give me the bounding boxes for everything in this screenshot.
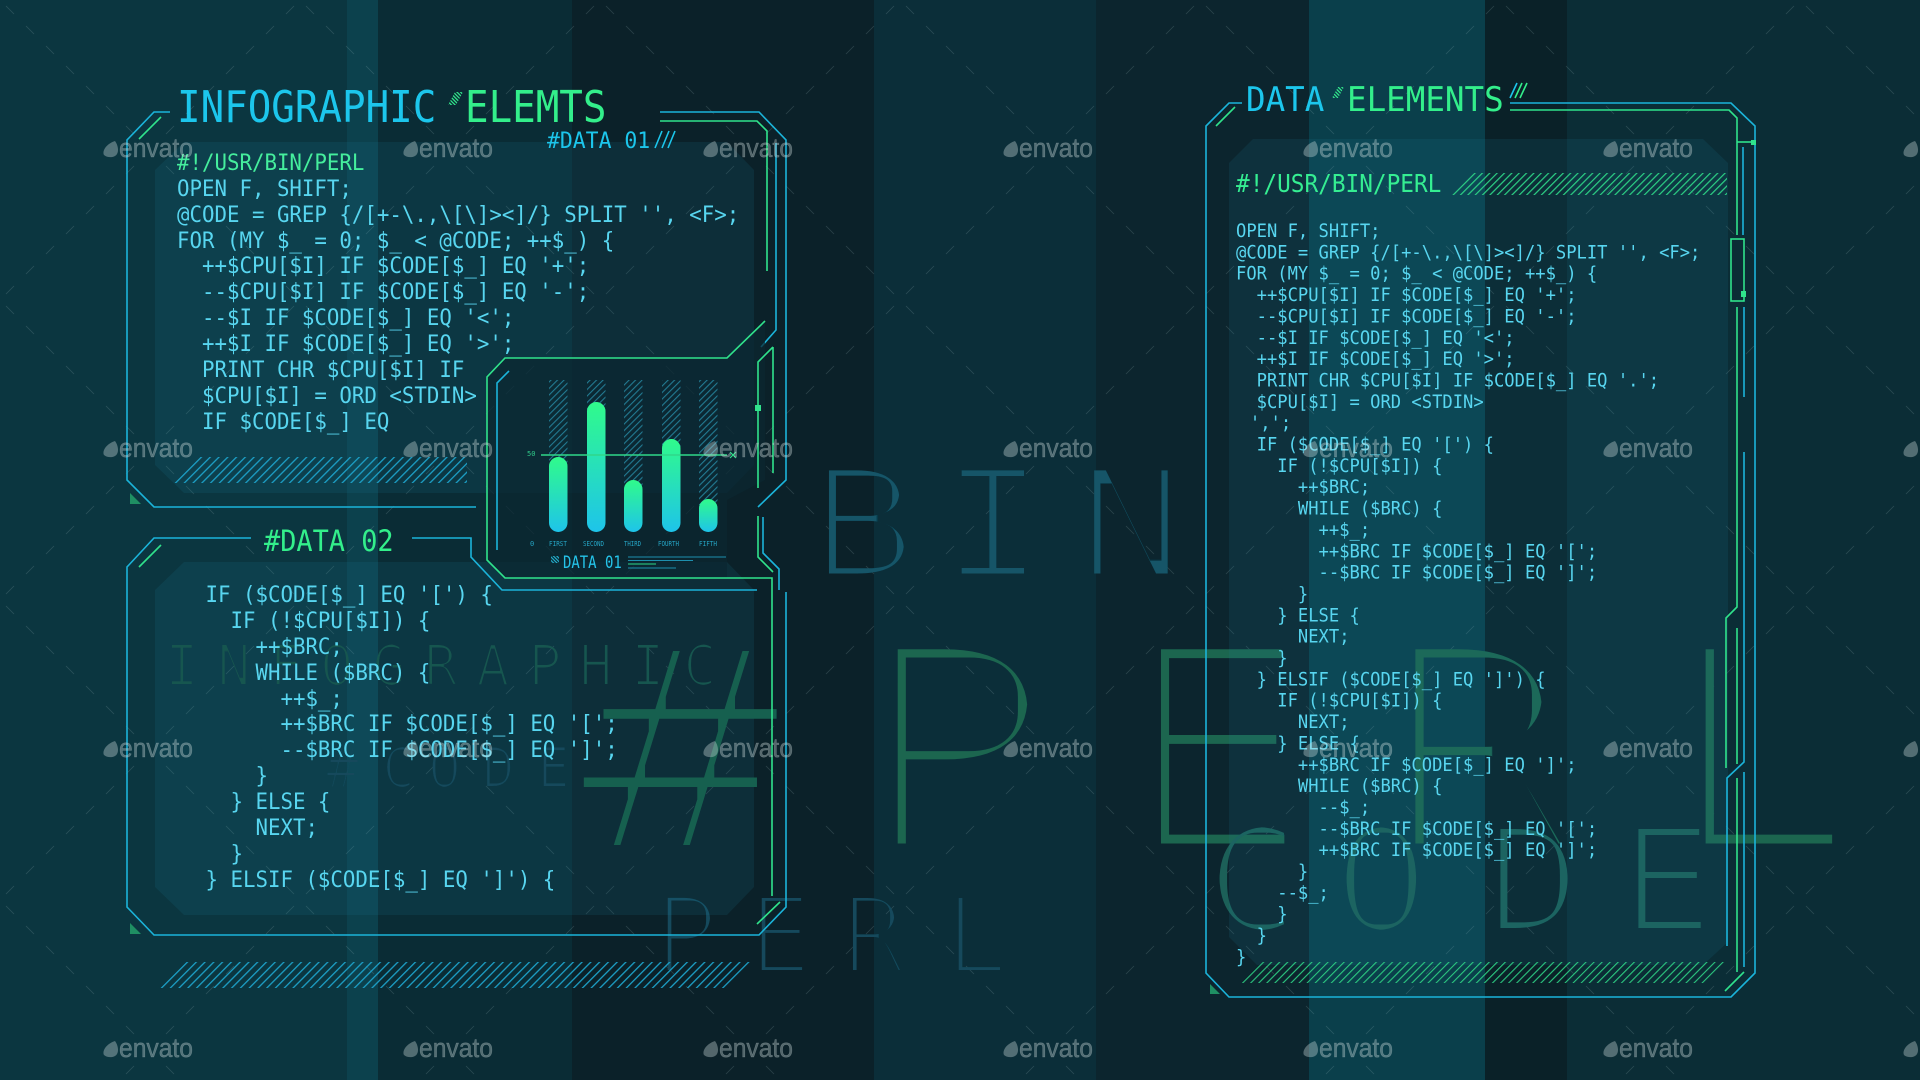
envato watermarks: envato — [1619, 733, 1693, 763]
chart axis labels: FOURTH — [658, 540, 679, 548]
chart axis labels: 0 — [530, 540, 534, 548]
envato watermarks: envato — [1019, 133, 1093, 163]
code block: data elements panel: OPEN F, SHIFT; — [1236, 220, 1380, 242]
code block: panel 2: } — [206, 841, 243, 867]
code block: panel 1: PRINT CHR $CPU[$I] IF — [177, 357, 464, 383]
code block: data elements panel: PRINT CHR $CPU[$I] IF $CODE[$_] EQ '.'; — [1236, 370, 1659, 392]
envato watermarks: envato — [119, 433, 193, 463]
code block: data elements panel: ++$BRC; — [1236, 477, 1370, 498]
code block: panel 2: IF ($CODE[$_] EQ '[') { — [206, 582, 493, 608]
envato watermarks: envato — [1619, 433, 1693, 463]
code block: panel 1: ++$CPU[$I] IF $CODE[$_] EQ '+'; — [177, 253, 589, 279]
code block: panel 1: IF $CODE[$_] EQ — [177, 409, 389, 435]
code block: data elements panel: } ELSE { — [1236, 733, 1360, 755]
code block: data elements panel: IF ($CODE[$_] EQ '[') { — [1236, 434, 1494, 456]
title: infographic elements: INFOGRAPHIC — [177, 81, 436, 133]
chart axis labels: FIRST — [549, 540, 568, 548]
code block: data elements panel: IF (!$CPU[$I]) { — [1236, 690, 1442, 712]
envato watermarks: envato — [119, 1033, 193, 1063]
code block: data elements panel: ++$_; — [1236, 519, 1370, 541]
envato watermarks: envato — [119, 733, 193, 763]
code block: data elements panel: NEXT; — [1236, 626, 1350, 648]
envato watermarks: envato — [719, 433, 793, 463]
code block: data elements panel: } — [1236, 647, 1288, 669]
code block: panel 1: FOR (MY $_ = 0; $_ < @CODE; ++$_) { — [177, 228, 614, 254]
envato watermarks: envato — [1619, 1033, 1693, 1063]
ghost word: small PERL: PERL — [654, 875, 1008, 999]
code block: data elements panel: NEXT; — [1236, 712, 1350, 733]
code block: data elements panel: ++$BRC IF $CODE[$_] EQ '['; — [1236, 541, 1597, 562]
envato watermarks: envato — [719, 133, 793, 163]
frame: data elements panel — [1206, 103, 1756, 997]
code block: data elements panel: } — [1236, 861, 1308, 883]
code block: data elements panel: --$BRC IF $CODE[$_] EQ ']'; — [1236, 562, 1597, 584]
code block: panel 2: } — [206, 763, 268, 789]
panel fill: data 02 — [155, 562, 754, 915]
envato watermarks: envato — [1319, 433, 1393, 463]
code block: panel 1 — [177, 150, 739, 435]
chart axis labels: SECOND — [583, 540, 604, 548]
chart axis labels: FIFTH — [699, 540, 717, 548]
code block: panel 1: @CODE = GREP {/[+-\.,\[\]><]/} SPLIT '', <F>; — [177, 202, 739, 228]
chart frame — [487, 321, 772, 896]
code block: data elements panel: WHILE ($BRC) { — [1236, 776, 1442, 797]
envato watermarks: envato — [419, 133, 493, 163]
panel fill: infographic elements — [155, 142, 754, 493]
code block: panel 2 — [206, 582, 618, 893]
code block: data elements panel: ++$I IF $CODE[$_] EQ '>'; — [1236, 348, 1515, 370]
envato watermarks: envato — [1019, 733, 1093, 763]
code block: panel 1: --$I IF $CODE[$_] EQ '<'; — [177, 305, 514, 331]
ghost word: large PERL: PERL — [853, 585, 1860, 919]
code block: panel 2: ++$BRC; — [206, 634, 343, 660]
title: infographic elements — [177, 81, 606, 133]
code block: data elements panel — [1236, 220, 1700, 968]
ghost word: CODE: CODE — [1204, 798, 1716, 966]
code block: data elements panel: --$I IF $CODE[$_] EQ '<'; — [1236, 327, 1515, 349]
code block: panel 1: $CPU[$I] = ORD <STDIN> — [177, 383, 477, 409]
code block: panel 2: WHILE ($BRC) { — [206, 660, 430, 686]
envato watermarks: envato — [1019, 1033, 1093, 1063]
code block: panel 2: ++$_; — [206, 686, 343, 712]
code block: panel 2: ++$BRC IF $CODE[$_] EQ '['; — [206, 711, 618, 737]
subheading: perl path with hatch — [1236, 169, 1727, 198]
code block: panel 1: --$CPU[$I] IF $CODE[$_] EQ '-'; — [177, 279, 589, 305]
code block: panel 1: ++$I IF $CODE[$_] EQ '>'; — [177, 331, 514, 357]
code block: data elements panel: --$_; — [1236, 797, 1370, 819]
envato watermarks: envato — [719, 733, 793, 763]
envato watermarks: envato — [1019, 433, 1093, 463]
envato watermarks: envato — [1619, 133, 1693, 163]
code block: data elements panel: @CODE = GREP {/[+-\.,\[\]><]/} SPLIT '', <F>; — [1236, 242, 1700, 264]
code block: panel 2: NEXT; — [206, 815, 318, 841]
chart caption: DATA 01 — [563, 553, 622, 572]
chart axis labels: THIRD — [624, 540, 641, 548]
code block: data elements panel: WHILE ($BRC) { — [1236, 498, 1442, 520]
envato watermarks: envato — [719, 1033, 793, 1063]
code block: panel 2: } ELSE { — [206, 789, 330, 815]
envato watermarks: envato — [1319, 133, 1393, 163]
hatch band: panel 1 — [171, 457, 467, 483]
code block: data elements panel: } — [1236, 583, 1308, 605]
heading: data 02: #DATA 02 — [264, 524, 394, 558]
envato watermarks: envato — [119, 133, 193, 163]
code block: panel 2: --$BRC IF $CODE[$_] EQ ']'; — [206, 737, 618, 763]
envato watermarks: envato — [419, 1033, 493, 1063]
code block: data elements panel: $CPU[$I] = ORD <STDIN> — [1236, 391, 1484, 413]
code block: data elements panel: FOR (MY $_ = 0; $_ < @CODE; ++$_) { — [1236, 263, 1597, 285]
hatch band: data elements panel — [1238, 962, 1728, 983]
frame: infographic elements panel — [127, 112, 786, 507]
frame: data 02 panel — [127, 516, 786, 935]
ghost symbol: large hash: # — [575, 586, 788, 919]
code block: data elements panel: --$CPU[$I] IF $CODE[$_] EQ '-'; — [1236, 306, 1577, 328]
code block: data elements panel: } — [1236, 925, 1267, 947]
code block: panel 2: IF (!$CPU[$I]) { — [206, 608, 430, 634]
code block: data elements panel: ++$BRC IF $CODE[$_] EQ ']'; — [1236, 840, 1597, 861]
code block: panel 2: } ELSIF ($CODE[$_] EQ ']') { — [206, 867, 555, 893]
code block: data elements panel: } — [1236, 946, 1246, 968]
envato watermarks: envato — [419, 733, 493, 763]
bar chart — [541, 380, 736, 532]
code block: data elements panel: } — [1236, 904, 1288, 925]
chart axis labels — [527, 450, 717, 548]
envato watermarks: envato — [419, 433, 493, 463]
chart caption — [551, 553, 726, 572]
chart backing — [487, 321, 765, 578]
code block: data elements panel: --$_; — [1236, 882, 1329, 904]
chart axis labels: 50 — [527, 450, 535, 458]
title: data elements: DATA — [1246, 79, 1324, 119]
heading: data 01: #DATA 01 — [547, 129, 650, 154]
subheading: perl path with hatch: #!/USR/BIN/PERL — [1236, 169, 1441, 198]
title: data elements — [1246, 79, 1527, 119]
ghost word: BIN: BIN — [809, 438, 1185, 613]
code block: data elements panel: IF (!$CPU[$I]) { — [1236, 455, 1442, 477]
code block: data elements panel: } ELSE { — [1236, 605, 1360, 626]
code block: data elements panel: } ELSIF ($CODE[$_] EQ ']') { — [1236, 669, 1546, 691]
code block: data elements panel: ++$BRC IF $CODE[$_] EQ ']'; — [1236, 754, 1577, 776]
panel fill: data elements — [1229, 139, 1728, 965]
code block: panel 1: OPEN F, SHIFT; — [177, 176, 352, 202]
code block: data elements panel: ','; — [1250, 413, 1291, 434]
code block: data elements panel: --$BRC IF $CODE[$_] EQ '['; — [1236, 818, 1597, 840]
envato watermarks: envato — [1319, 1033, 1393, 1063]
title: infographic elements: ELEMTS — [465, 81, 606, 133]
ghost word: INFOGRAPHIC: INFOGRAPHIC — [165, 634, 717, 699]
chart panel — [487, 321, 773, 896]
hatch band: below panel 2 — [157, 962, 750, 988]
code block: data elements panel: ++$CPU[$I] IF $CODE[$_] EQ '+'; — [1236, 284, 1577, 306]
code block: panel 1: #!/USR/BIN/PERL — [177, 150, 364, 176]
envato watermarks: envato — [1319, 733, 1393, 763]
title: data elements: ELEMENTS — [1347, 79, 1504, 119]
ghost word: #CODE: #CODE — [326, 736, 570, 800]
